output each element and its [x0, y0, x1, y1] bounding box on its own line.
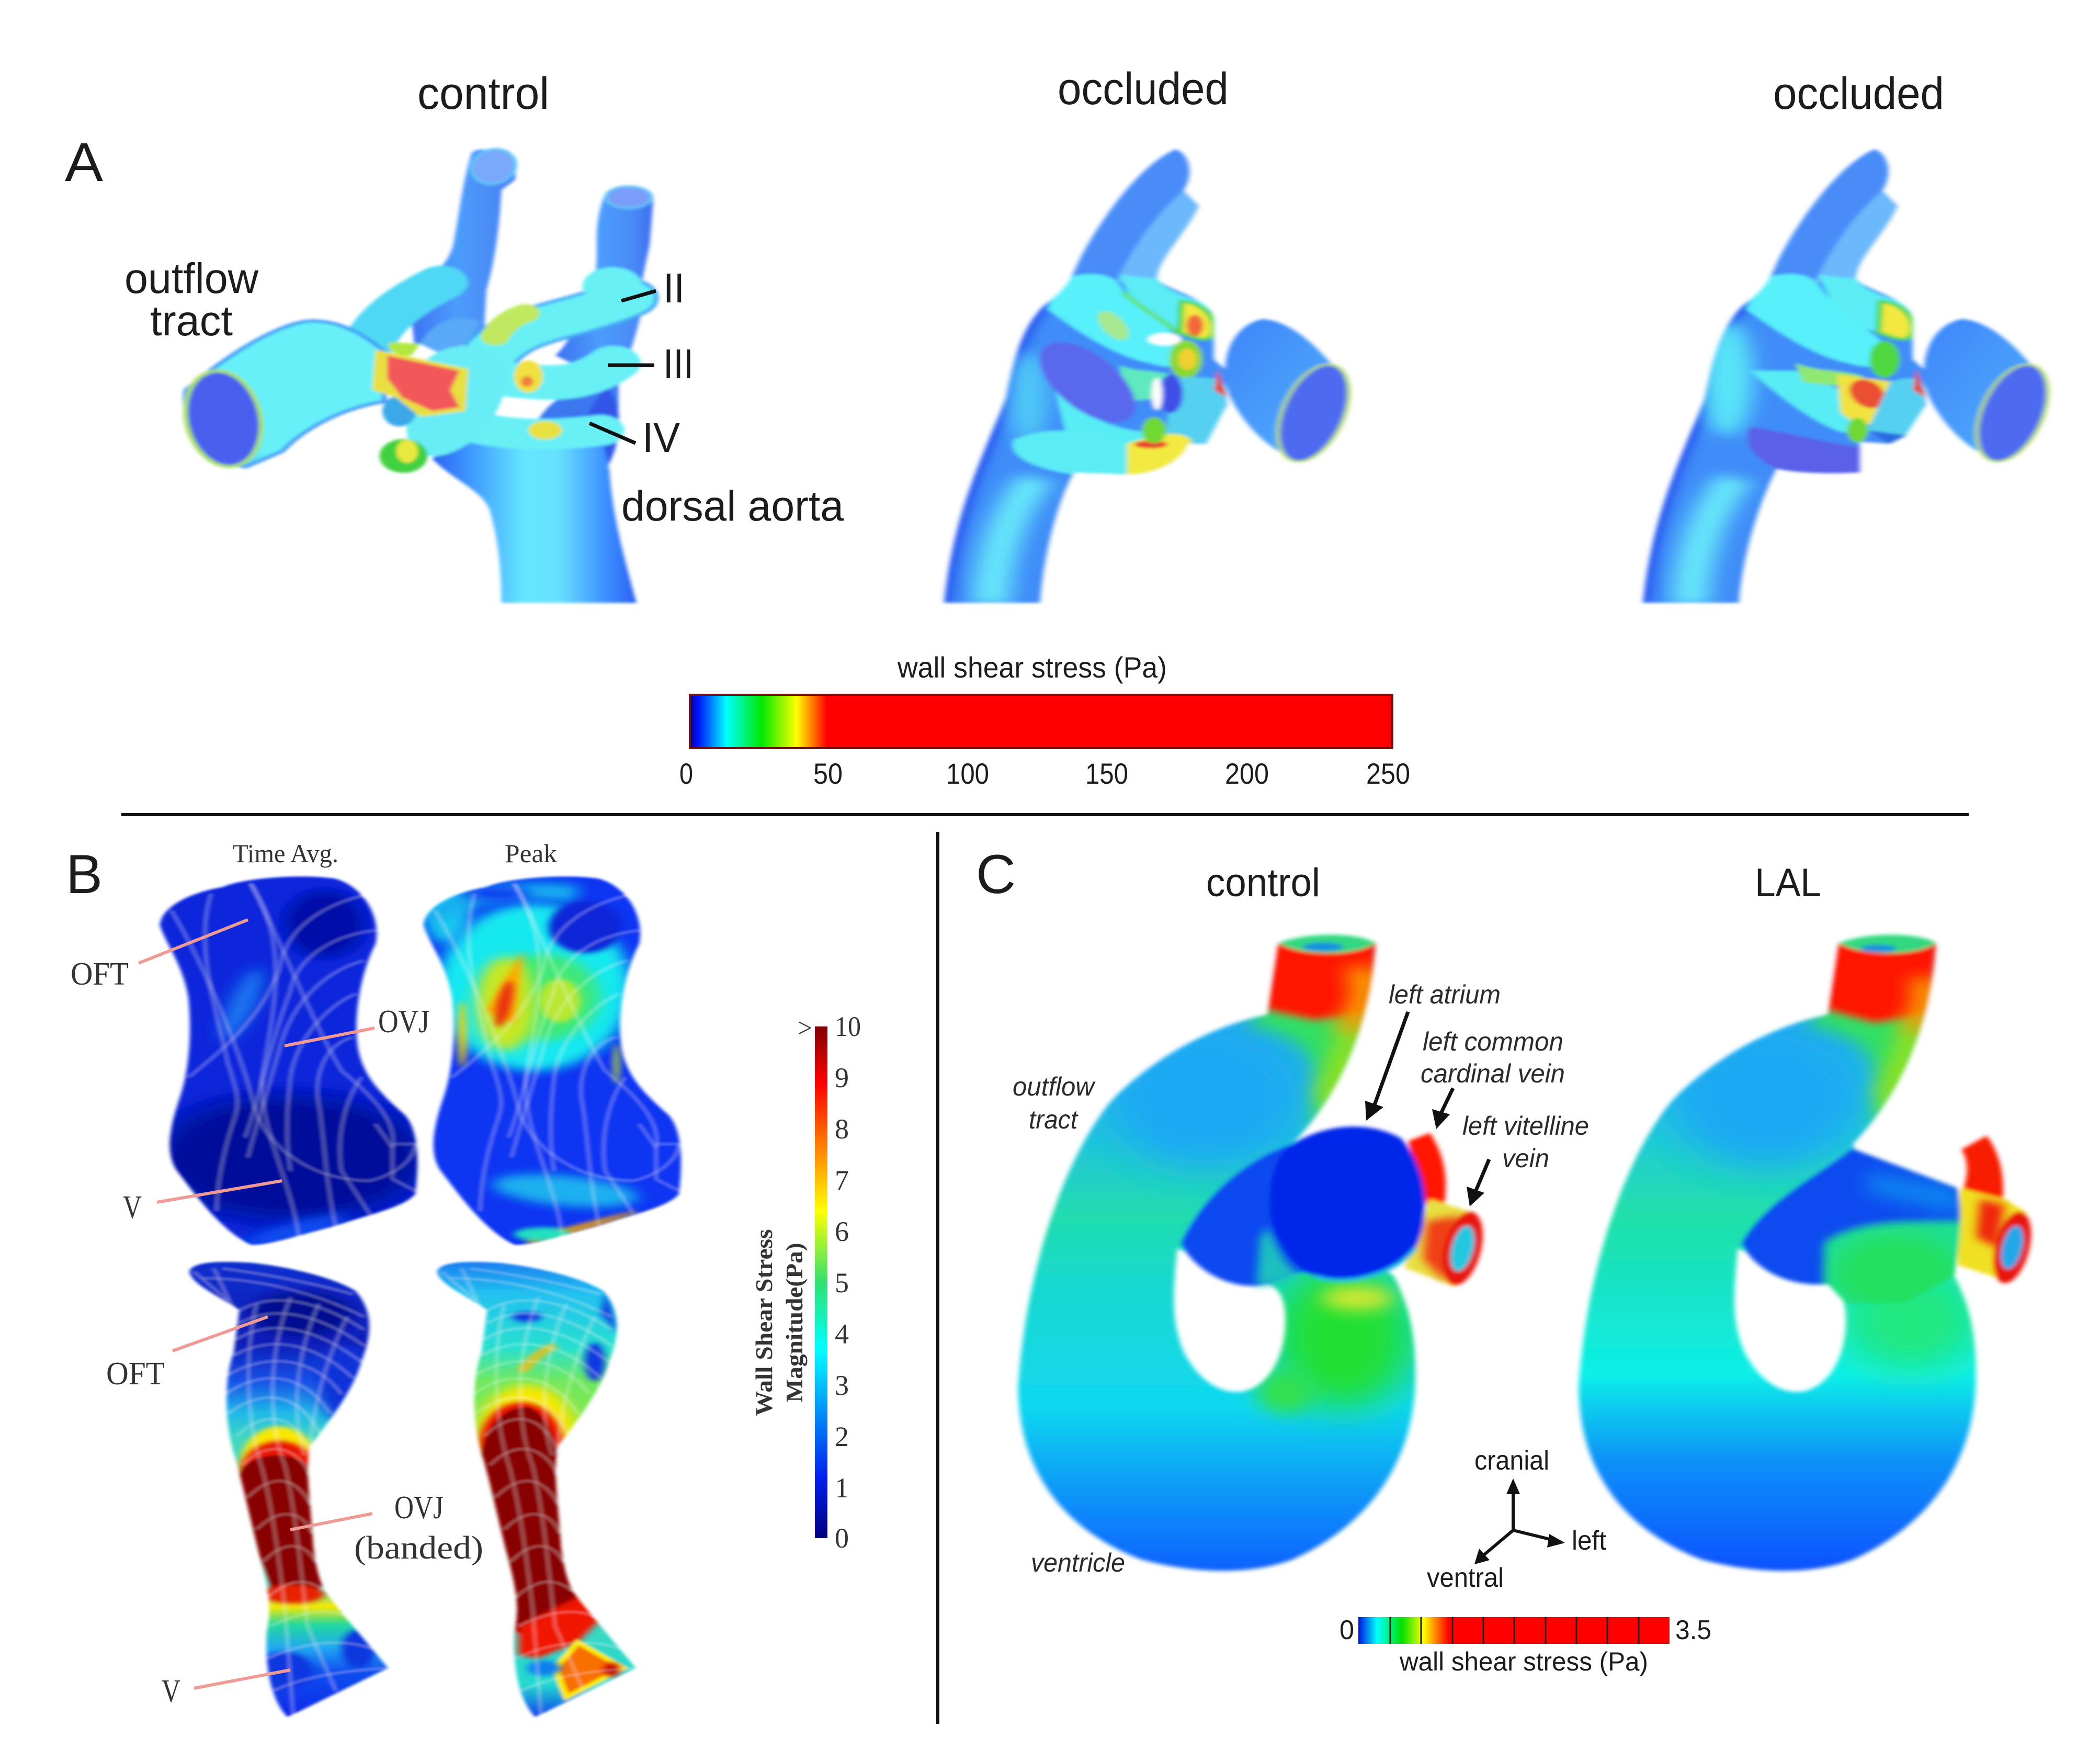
label: OVJ (upper): [285, 1004, 429, 1046]
model: LAL heart: [1557, 918, 2037, 1590]
colour bar: wall shear stress 0-3.5 Pa: wall shear stress (Pa): [1399, 1647, 1648, 1676]
label: OVJ (upper): OVJ: [378, 1004, 429, 1040]
colour bar: wall shear stress magnitude 0-10 Pa: [751, 1011, 861, 1554]
heading: panel letter A: A: [65, 132, 103, 193]
callout: left atrium: left atrium: [1389, 980, 1501, 1009]
callout: left common cardinal vein: cardinal vein: [1421, 1059, 1565, 1088]
colour bar: wall shear stress magnitude 0-10 Pa: 1: [835, 1472, 849, 1504]
colour bar: wall shear stress magnitude 0-10 Pa: 7: [835, 1165, 849, 1196]
vertical divider: [936, 832, 939, 1724]
orientation axes: ventral: [1427, 1563, 1504, 1593]
label: outflow tract: outflow: [1013, 1072, 1096, 1101]
label: OFT (upper): [71, 920, 248, 992]
model: control time averaged: [157, 875, 421, 1247]
colour bar: wall shear stress 0-250 Pa: 150: [1085, 757, 1128, 790]
colour bar: wall shear stress 0-3.5 Pa: [1340, 1615, 1711, 1676]
label: dorsal aorta: dorsal aorta: [621, 482, 844, 530]
model: banded time averaged: [183, 1256, 398, 1720]
horizontal divider: [121, 813, 1969, 816]
heading: Peak: Peak: [505, 839, 557, 868]
label: arch II: II: [663, 265, 685, 311]
label: arch III: III: [663, 341, 694, 387]
model: control heart: [996, 918, 1490, 1590]
label: outflow tract: [124, 255, 259, 345]
model: banded peak: [430, 1256, 646, 1720]
colour bar: wall shear stress magnitude 0-10 Pa: 5: [835, 1267, 849, 1299]
model: occluded arches (middle): [930, 144, 1361, 608]
label: V (lower): V: [162, 1674, 180, 1709]
colour bar: wall shear stress magnitude 0-10 Pa: 10: [835, 1011, 861, 1042]
colour bar: wall shear stress 0-250 Pa: 200: [1225, 757, 1269, 790]
heading: control: control: [417, 69, 549, 119]
label: V (lower): [162, 1670, 290, 1709]
label: ventricle: ventricle: [1031, 1548, 1125, 1577]
panel A: aortic arch wall shear stress: [65, 64, 2060, 790]
model: occluded arches (right): [1629, 144, 2060, 608]
label: OFT (lower): [106, 1317, 268, 1392]
label: outflow tract: outflow: [124, 255, 259, 302]
callout: left common cardinal vein: left common: [1423, 1027, 1563, 1056]
colour bar: wall shear stress 0-250 Pa: 0: [679, 757, 693, 790]
label: arch IV: IV: [642, 414, 680, 461]
colour bar: wall shear stress magnitude 0-10 Pa: 0: [835, 1522, 849, 1554]
label: V (upper): V: [123, 1190, 142, 1225]
colour bar: wall shear stress 0-3.5 Pa: 3.5: [1675, 1615, 1711, 1645]
label: outflow tract: [1013, 1072, 1096, 1134]
colour bar: wall shear stress magnitude 0-10 Pa: 9: [835, 1062, 849, 1093]
label: outflow tract: tract: [1029, 1105, 1079, 1134]
label: outflow tract: tract: [150, 297, 233, 345]
callout: left common cardinal vein: [1421, 1027, 1565, 1129]
callout: left vitelline vein: vein: [1502, 1144, 1549, 1173]
panel C: control versus LAL heart: [976, 844, 2037, 1676]
colour bar: wall shear stress 0-250 Pa: 50: [813, 757, 843, 790]
label: OFT (upper): OFT: [71, 956, 129, 992]
colour bar: wall shear stress magnitude 0-10 Pa: Magnitude(Pa): [781, 1243, 808, 1402]
heading: panel letter B: B: [66, 844, 103, 905]
colour bar: wall shear stress 0-250 Pa: wall shear stress (Pa): [897, 651, 1167, 684]
heading: panel letter C: C: [976, 844, 1016, 905]
heading: occluded (right): occluded: [1773, 69, 1944, 119]
label: OFT (lower): OFT: [106, 1356, 165, 1392]
colour bar: wall shear stress magnitude 0-10 Pa: 8: [835, 1113, 849, 1145]
colour bar: wall shear stress 0-250 Pa: 250: [1366, 757, 1410, 790]
colour bar: wall shear stress 0-3.5 Pa: 0: [1340, 1615, 1354, 1645]
colour bar: wall shear stress magnitude 0-10 Pa: 2: [835, 1421, 849, 1452]
colour bar: wall shear stress 0-250 Pa: [679, 651, 1410, 790]
orientation axes: left: [1572, 1526, 1607, 1556]
colour bar: wall shear stress magnitude 0-10 Pa: 6: [835, 1216, 849, 1247]
label: V (upper): [123, 1181, 282, 1225]
callout: left vitelline vein: left vitelline: [1462, 1111, 1589, 1141]
panel B: banded outflow tract wall shear stress: [66, 839, 861, 1720]
callout: left vitelline vein: [1462, 1111, 1589, 1206]
label: OVJ (banded): (banded): [354, 1530, 483, 1566]
label: arch IV: [589, 414, 680, 461]
orientation axes: [1427, 1446, 1607, 1593]
colour bar: wall shear stress magnitude 0-10 Pa: 3: [835, 1370, 849, 1401]
colour bar: wall shear stress magnitude 0-10 Pa: >: [798, 1013, 812, 1043]
colour bar: wall shear stress magnitude 0-10 Pa: 4: [835, 1318, 849, 1350]
label: OVJ (banded): OVJ: [394, 1490, 444, 1526]
heading: LAL: LAL: [1755, 861, 1821, 905]
colour bar: wall shear stress 0-250 Pa: 100: [946, 757, 989, 790]
label: arch II: [621, 265, 685, 311]
model: control aortic arches: [178, 146, 653, 603]
heading: occluded (middle): occluded: [1058, 64, 1229, 114]
heading: Time Avg.: Time Avg.: [233, 839, 338, 868]
callout: left atrium: [1365, 980, 1501, 1121]
label: OVJ (banded): [290, 1490, 483, 1566]
colour bar: wall shear stress magnitude 0-10 Pa: Wall Shear Stress: [751, 1229, 777, 1416]
orientation axes: cranial: [1474, 1446, 1549, 1476]
heading: control: control: [1206, 861, 1320, 905]
model: control peak: [421, 875, 684, 1247]
